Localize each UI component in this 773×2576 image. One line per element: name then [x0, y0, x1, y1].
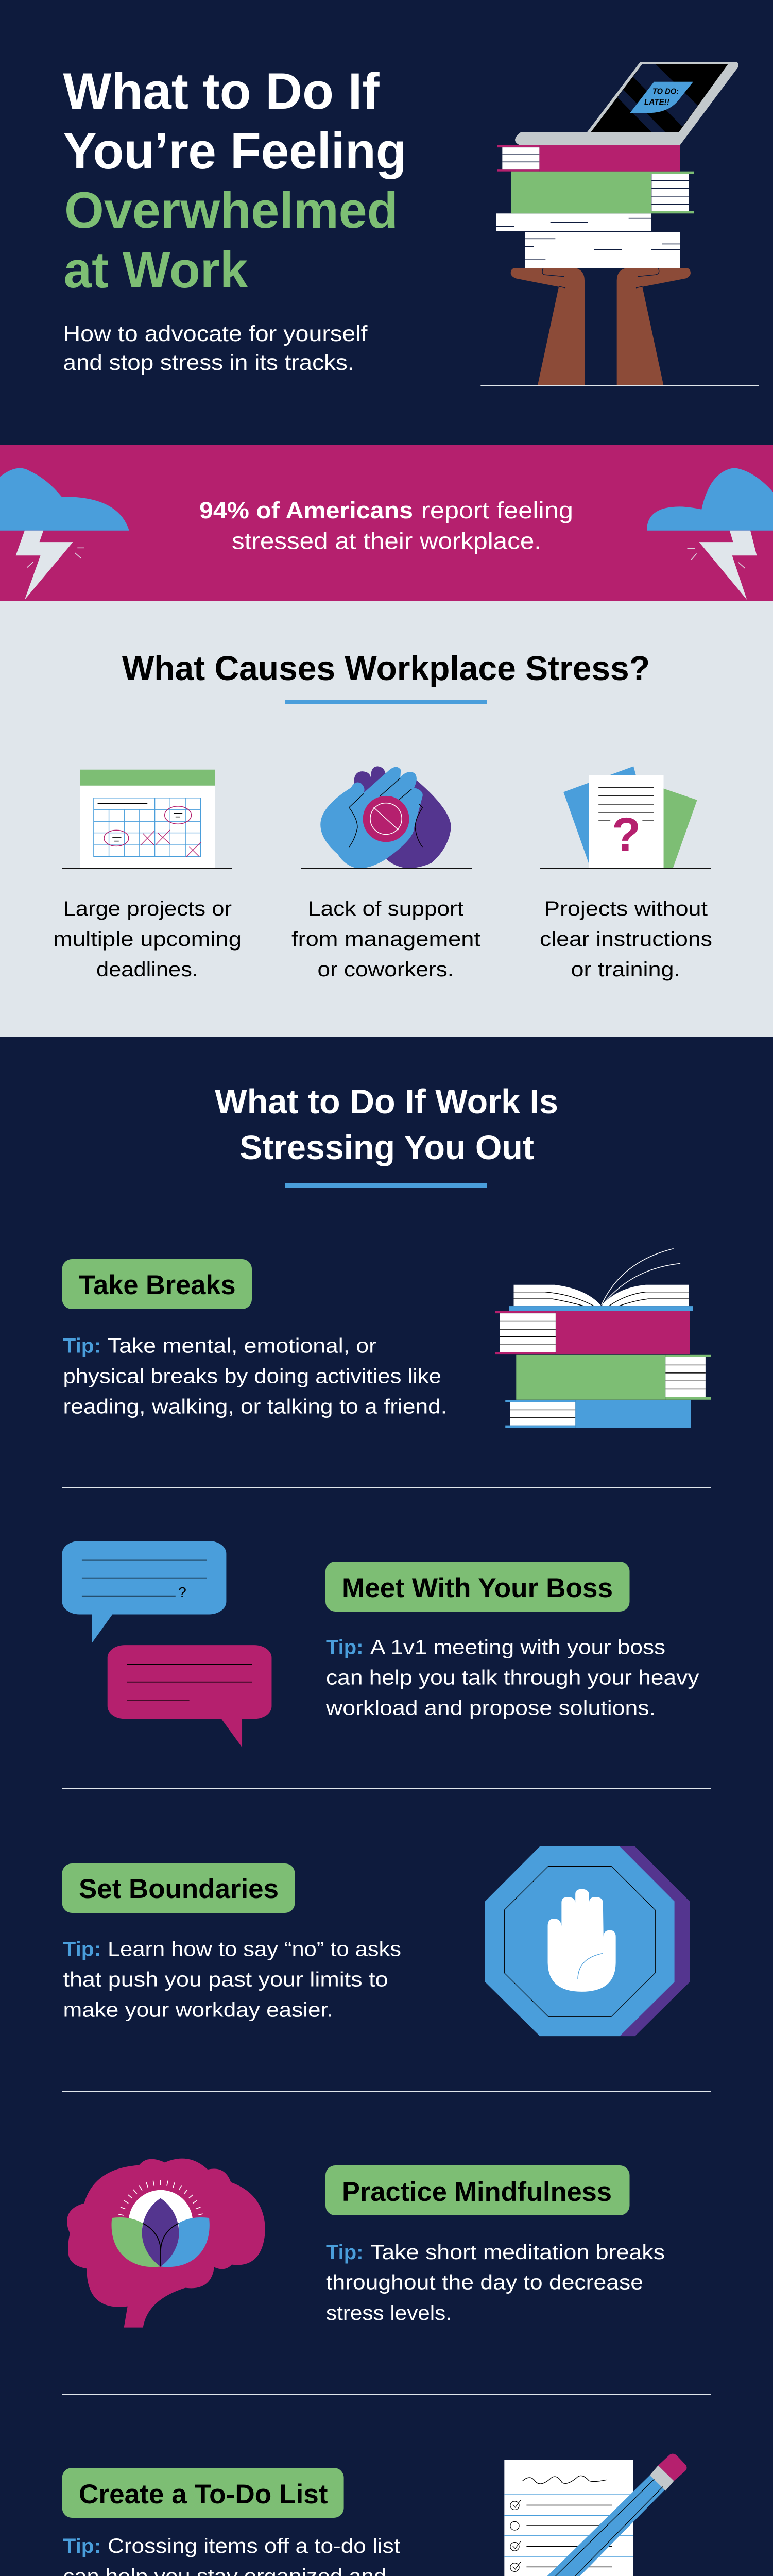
baseline [540, 868, 711, 869]
tip: create a to-do list [62, 2454, 687, 2576]
label badge [325, 2165, 629, 2215]
panel: what causes workplace stress [0, 601, 773, 1037]
divider [62, 2091, 711, 2092]
label badge: Practice Mindfulness [342, 2177, 612, 2207]
caption [291, 897, 480, 981]
label badge [62, 2468, 344, 2518]
tip text: Tip: [63, 1938, 101, 1960]
baseline [62, 868, 232, 869]
tip text: workload and propose solutions. [325, 1697, 656, 1720]
icon: speech bubbles [62, 1541, 271, 1748]
label badge [62, 1259, 252, 1309]
title: at Work [64, 241, 248, 298]
divider [62, 2394, 711, 2395]
caption: Lack of support [308, 897, 463, 920]
caption: clear instructions [540, 928, 712, 951]
heading underline [285, 1183, 487, 1188]
tip text: throughout the day to decrease [326, 2271, 643, 2294]
icon: papers with question mark [563, 766, 697, 868]
statistic text: stressed at their workplace. [232, 528, 541, 554]
statistic text [199, 497, 573, 554]
caption [53, 897, 242, 981]
baseline [301, 868, 472, 869]
sticky note text: TO DO: [652, 88, 679, 96]
caption: from management [291, 928, 480, 951]
icon: stop sign with hand [485, 1846, 690, 2036]
label badge [62, 1863, 295, 1913]
tip: meet with your boss [62, 1541, 699, 1748]
title: What to Do If [63, 62, 380, 120]
tip text [326, 2241, 665, 2325]
tip text [63, 1335, 447, 1418]
heading [215, 1082, 558, 1167]
title: Overwhelmed [64, 181, 398, 239]
statistic text: 94% of Americans [199, 497, 413, 523]
panel: statistic band [0, 445, 773, 601]
tip text [63, 1938, 401, 2021]
tip: take breaks [62, 1249, 711, 1428]
subtitle [63, 321, 368, 375]
label badge: Set Boundaries [79, 1874, 279, 1904]
cause: deadlines [53, 770, 242, 981]
icon: speech bubbles: ? [178, 1584, 186, 1600]
subtitle: and stop stress in its tracks. [63, 350, 354, 375]
caption: multiple upcoming [53, 928, 242, 951]
tip text: Crossing items off a to-do list [108, 2535, 400, 2557]
caption: deadlines. [96, 958, 198, 981]
caption [540, 897, 712, 981]
heading: Stressing You Out [239, 1128, 534, 1167]
caption: or training. [571, 958, 680, 981]
question mark: ? [612, 808, 641, 861]
icon: hands with no symbol [320, 766, 451, 869]
tip text [325, 1636, 699, 1720]
cause: lack of support [291, 766, 480, 981]
title [63, 62, 407, 298]
title: You’re Feeling [63, 122, 407, 179]
divider [62, 1788, 711, 1789]
label badge: Take Breaks [79, 1270, 236, 1300]
sticky note text: LATE!! [644, 98, 670, 107]
tip text: stress levels. [326, 2302, 452, 2325]
label badge: Create a To-Do List [79, 2479, 328, 2510]
tip text: A 1v1 meeting with your boss [370, 1636, 665, 1659]
tip text: Take short meditation breaks [370, 2241, 665, 2264]
caption: Projects without [544, 897, 708, 920]
tip text: that push you past your limits to [63, 1968, 388, 1991]
icon: calendar [80, 770, 215, 868]
label badge: Meet With Your Boss [342, 1573, 613, 1603]
icon: checklist and pencil [504, 2454, 687, 2576]
caption: or coworkers. [317, 958, 454, 981]
tip text: Tip: [326, 1636, 364, 1659]
icon: brain with lotus [67, 2159, 265, 2328]
cause: unclear projects [540, 766, 712, 981]
icon: stack of books [495, 1249, 711, 1428]
label badge [325, 1562, 629, 1612]
caption: Large projects or [63, 897, 232, 920]
icon: left storm cloud [0, 468, 129, 600]
tip text: Tip: [326, 2241, 364, 2264]
tip text [63, 2535, 400, 2576]
tip: set boundaries [62, 1846, 690, 2036]
subtitle: How to advocate for yourself [63, 321, 368, 346]
tip text: Take mental, emotional, or [108, 1335, 376, 1358]
heading: What Causes Workplace Stress? [122, 649, 650, 688]
tip: practice mindfulness [67, 2159, 665, 2328]
tip text: Tip: [63, 2535, 101, 2557]
tip text: Learn how to say “no” to asks [108, 1938, 401, 1960]
panel: what to do [0, 1037, 773, 2576]
tip text: Tip: [63, 1335, 101, 1358]
icon: right storm cloud [647, 468, 773, 600]
heading: What to Do If Work Is [215, 1082, 558, 1121]
heading underline [285, 700, 487, 704]
divider [62, 1487, 711, 1488]
panel: hero [0, 0, 773, 445]
icon: hands holding books and laptop [480, 62, 759, 386]
tip text: make your workday easier. [63, 1998, 333, 2021]
tip text: reading, walking, or talking to a friend. [63, 1395, 447, 1418]
tip text: can help you talk through your heavy [326, 1667, 699, 1689]
sticky note text [644, 88, 679, 107]
tip text: physical breaks by doing activities like [63, 1365, 441, 1388]
statistic text: report feeling [421, 497, 573, 523]
